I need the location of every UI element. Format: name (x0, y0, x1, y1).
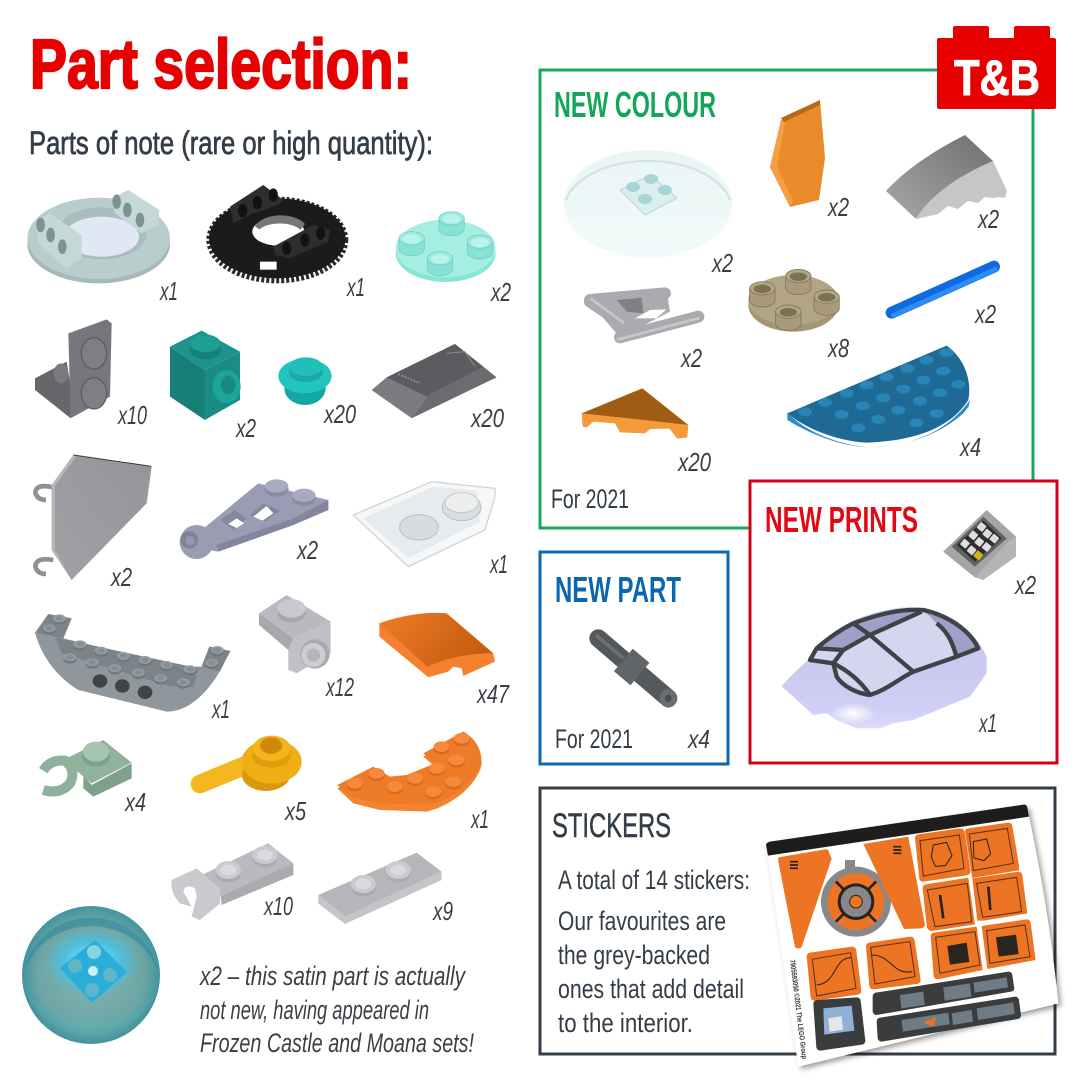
label: x12 (325, 672, 354, 702)
part: tan round plate (748, 269, 839, 332)
label: x2 (679, 343, 702, 373)
text block: the grey-backed (558, 940, 710, 970)
part: trans dish (564, 150, 732, 258)
part: teal 1x1 brick with side stud (170, 331, 241, 420)
heading: NEW PART (555, 569, 681, 610)
label: x10 (263, 891, 293, 921)
text block (558, 865, 750, 1038)
label: x20 (469, 403, 504, 433)
part: teal round 1x1 (278, 357, 332, 405)
label: x2 (490, 277, 511, 307)
part: orange curved slope (379, 613, 495, 677)
part: sand green clip plate (43, 740, 132, 797)
label: x10 (117, 400, 147, 430)
label: x1 (489, 549, 508, 579)
label: x4 (123, 787, 146, 817)
part: turntable light grey (27, 190, 170, 283)
part: keypad slope (943, 510, 1016, 580)
label: x9 (432, 896, 453, 926)
part: grey ingot (372, 344, 497, 418)
label: x2 (826, 192, 849, 222)
label: x2 (976, 204, 999, 234)
text block: Our favourites are (558, 906, 726, 936)
label: x1 (211, 694, 230, 724)
text block: A total of 14 stickers: (558, 865, 750, 895)
part: silver hinge (590, 291, 698, 339)
label: x8 (826, 333, 849, 363)
heading: NEW COLOUR (554, 84, 716, 125)
part: grey clip plate (171, 843, 293, 920)
part: printed canopy (782, 607, 987, 728)
label: x1 (159, 276, 178, 306)
logo: T&B brick (937, 26, 1056, 109)
part: transparent plate (353, 482, 495, 567)
caption: satin part: x2 – this satin part is actually (198, 961, 466, 991)
label: x2 (235, 413, 256, 443)
part: blue bar (892, 267, 995, 315)
label: x2 (973, 299, 996, 329)
panel: new colour (540, 70, 1033, 528)
part: grey jumper plate (318, 853, 442, 924)
title: Part selection: (30, 25, 412, 103)
text block: to the interior. (558, 1008, 693, 1038)
caption: satin part: Frozen Castle and Moana sets! (200, 1028, 474, 1058)
logo: T&B brick: T&B (954, 50, 1040, 106)
panel: new part (540, 552, 728, 764)
label: x2 (1013, 570, 1036, 600)
part: grey flag (35, 455, 152, 580)
part: boat hull (35, 614, 231, 712)
part: black gear turntable (209, 185, 346, 281)
part: orange tile (770, 100, 825, 207)
text block: ones that add detail (558, 974, 744, 1004)
note: For 2021 (551, 484, 629, 514)
label: x1 (346, 272, 365, 302)
part: orange half plate (337, 732, 482, 812)
part: dark grey pin (596, 635, 677, 708)
part: satin globe (22, 906, 160, 1044)
label: x47 (475, 679, 510, 709)
caption: satin part (198, 961, 474, 1058)
caption: satin part: not new, having appeared in (200, 995, 429, 1025)
part: light grey bracket (259, 595, 331, 673)
label: x20 (676, 447, 711, 477)
panel: new prints (750, 481, 1057, 763)
part: orange tile triangle (582, 388, 688, 439)
label: x20 (322, 399, 356, 429)
label: x1 (470, 804, 489, 834)
part: dark grey bracket (35, 319, 112, 418)
subtitle: Parts of note (rare or high quantity): (29, 125, 433, 161)
part: yellow stud with bar (200, 736, 302, 791)
heading: STICKERS (552, 807, 671, 845)
part: grey wedge (886, 135, 1007, 219)
label: x5 (283, 796, 306, 826)
label: x2 (710, 248, 733, 278)
sticker sheet (766, 805, 1058, 1067)
part: lever plate (180, 479, 328, 559)
label: x2 (295, 535, 318, 565)
label: x1 (978, 708, 997, 738)
part: trans teal round plate (396, 212, 496, 282)
heading: NEW PRINTS (765, 499, 918, 540)
label: x4 (958, 432, 981, 462)
label: x2 (109, 562, 132, 592)
part: dark azure half plate (787, 346, 970, 447)
note: For 2021 (555, 724, 633, 754)
label: x4 (686, 724, 710, 754)
panel: stickers (540, 788, 1058, 1067)
